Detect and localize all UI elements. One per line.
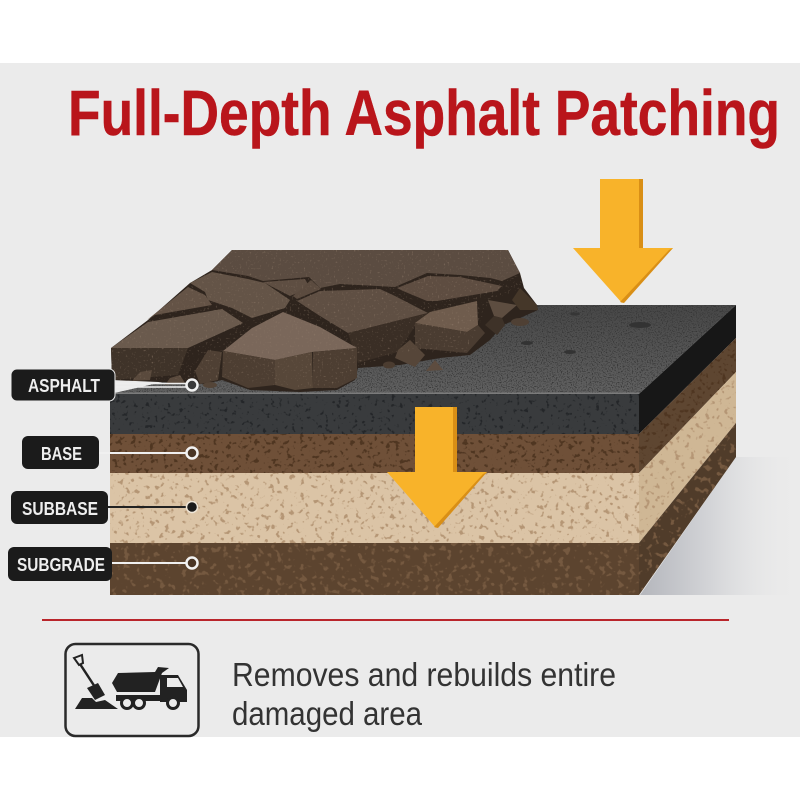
asphalt top surface <box>110 305 736 394</box>
label: base <box>22 436 198 469</box>
arrow: down through layers <box>387 407 487 528</box>
front layer: subgrade <box>110 543 639 595</box>
front layer: subbase <box>110 473 639 543</box>
caption text: damaged area <box>232 695 423 732</box>
label: subbase <box>11 491 198 524</box>
ground shadow <box>640 457 800 595</box>
label: subgrade <box>8 547 198 581</box>
front layer: base <box>110 434 639 473</box>
icon: shovel and dump truck <box>66 644 198 736</box>
cracked asphalt slab <box>111 250 538 392</box>
right side faces <box>639 305 736 595</box>
caption text <box>232 656 616 732</box>
caption text: Removes and rebuilds entire <box>232 656 616 693</box>
front layer: asphalt <box>110 394 639 434</box>
label: subbase: SUBBASE <box>22 499 98 519</box>
label: asphalt: ASPHALT <box>28 376 100 396</box>
label: base: BASE <box>41 444 82 464</box>
arrow: down onto surface <box>573 179 673 303</box>
label: subgrade: SUBGRADE <box>17 555 105 575</box>
pavement cross-section diagram <box>110 179 800 595</box>
label: asphalt <box>11 369 198 401</box>
